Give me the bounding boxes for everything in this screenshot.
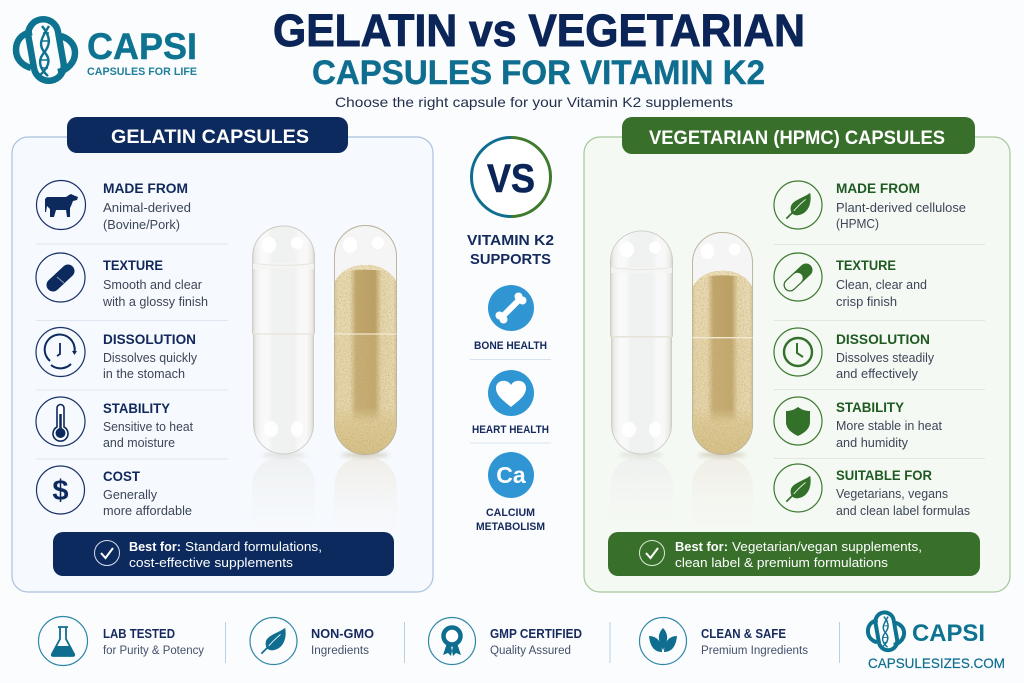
center column: VS: VS — [487, 157, 535, 201]
footer badge: gmp certified — [428, 618, 582, 664]
panel: vegetarian capsules — [584, 117, 1010, 592]
capsules: vegetarian empty and filled — [610, 231, 753, 530]
benefit: calcium metabolism: CALCIUM — [486, 507, 535, 519]
row: dissolution: DISSOLUTION — [103, 332, 196, 347]
row: cost: more affordable — [103, 504, 192, 518]
benefit: bone health: BONE HEALTH — [474, 340, 547, 352]
title — [273, 5, 805, 92]
footer badge: gmp certified: Quality Assured — [490, 645, 571, 657]
row: texture — [36, 253, 208, 309]
row: texture: with a glossy finish — [102, 295, 208, 309]
row: cost — [36, 466, 192, 518]
row: made from: MADE FROM — [103, 181, 188, 196]
row: stability: and moisture — [103, 436, 175, 450]
callout: best for gelatin — [53, 532, 394, 576]
footer badge: clean and safe: CLEAN & SAFE — [701, 627, 786, 641]
capsules: gelatin empty and filled — [252, 226, 397, 530]
benefit: calcium metabolism — [476, 452, 545, 533]
footer badge: clean and safe — [640, 618, 808, 664]
row: stability — [36, 397, 194, 450]
row: made from — [774, 181, 966, 231]
heading: vegetarian capsules: VEGETARIAN (HPMC) CAPSULES — [649, 128, 945, 149]
footer badge: lab tested — [38, 616, 204, 666]
row: made from: Animal-derived — [103, 201, 191, 215]
footer logo: capsi capsulesizes.com — [868, 611, 1005, 671]
row: dissolution: Dissolves quickly — [103, 351, 198, 365]
row: dissolution: Dissolves steadily — [836, 351, 935, 365]
row: cost: $ — [52, 475, 69, 507]
row: dissolution: and effectively — [836, 367, 919, 381]
row: suitable for: and clean label formulas — [836, 504, 970, 518]
row: made from: (HPMC) — [836, 217, 879, 231]
footer logo: capsi capsulesizes.com: CAPSULESIZES.COM — [868, 655, 1005, 671]
callout: best for gelatin: Best for: — [129, 539, 181, 554]
row: made from: Plant-derived cellulose — [836, 201, 966, 215]
benefit: calcium metabolism: Ca — [496, 462, 526, 488]
row: texture: TEXTURE — [103, 258, 163, 273]
heading: vitamin k2 supports — [467, 232, 554, 268]
row: suitable for: Vegetarians, vegans — [836, 487, 948, 501]
row: stability — [774, 397, 943, 450]
title: GELATIN vs VEGETARIAN — [273, 5, 805, 56]
row: texture: Clean, clear and — [836, 278, 927, 292]
benefit: heart health: HEART HEALTH — [472, 424, 549, 436]
callout: best for vegetarian — [608, 532, 980, 576]
benefit: bone health — [474, 285, 547, 352]
heading: gelatin capsules: GELATIN CAPSULES — [111, 127, 309, 148]
callout: best for vegetarian: Best for: — [675, 539, 728, 554]
title: CAPSULES FOR VITAMIN K2 — [312, 54, 765, 92]
row: texture: crisp finish — [836, 295, 897, 309]
row: stability: More stable in heat — [836, 419, 943, 433]
callout: best for vegetarian: clean label & premium formulations — [675, 555, 889, 570]
footer badge: non-gmo — [250, 618, 374, 664]
footer logo: capsi capsulesizes.com: CAPSI — [912, 620, 985, 647]
callout: best for vegetarian: Vegetarian/vegan supplements, — [732, 539, 922, 554]
callout: best for gelatin: cost-effective supplements — [129, 555, 294, 570]
logo: CAPSI: CAPSULES FOR LIFE — [87, 66, 197, 78]
benefit: heart health — [472, 370, 549, 436]
footer badge: lab tested: for Purity & Potency — [103, 645, 204, 657]
row: suitable for: SUITABLE FOR — [836, 468, 932, 483]
row: stability: Sensitive to heat — [103, 420, 194, 434]
row: stability: STABILITY — [103, 401, 170, 416]
callout: best for gelatin: Standard formulations, — [185, 539, 322, 554]
row: made from: (Bovine/Pork) — [103, 218, 180, 232]
row: texture: TEXTURE — [836, 258, 896, 273]
center column: VS — [472, 138, 550, 216]
row: cost: Generally — [103, 488, 158, 502]
row: dissolution — [36, 328, 198, 381]
heading: gelatin capsules — [67, 117, 348, 153]
row: suitable for — [774, 464, 970, 518]
footer badge: clean and safe: Premium Ingredients — [701, 645, 808, 657]
footer badge: gmp certified: GMP CERTIFIED — [490, 627, 582, 641]
row: made from: MADE FROM — [836, 181, 920, 196]
heading: vegetarian capsules — [622, 117, 975, 154]
benefit: calcium metabolism: METABOLISM — [476, 521, 545, 533]
panel: gelatin capsules — [12, 117, 433, 592]
row: texture — [774, 253, 927, 309]
row: dissolution — [774, 328, 935, 381]
heading: vitamin k2 supports: SUPPORTS — [470, 251, 551, 268]
row: dissolution: DISSOLUTION — [836, 332, 930, 347]
row: stability: and humidity — [836, 436, 909, 450]
footer badge: non-gmo: Ingredients — [311, 645, 369, 657]
heading: vitamin k2 supports: VITAMIN K2 — [467, 232, 554, 249]
footer badge: non-gmo: NON-GMO — [311, 627, 374, 641]
logo: CAPSI — [16, 17, 197, 83]
row: stability: STABILITY — [836, 400, 904, 415]
subtitle: Choose the right capsule for your Vitamin K2 supplements — [335, 94, 733, 110]
logo: CAPSI: CAPSI — [87, 26, 197, 67]
row: dissolution: in the stomach — [103, 367, 185, 381]
row: cost: COST — [103, 469, 141, 484]
row: texture: Smooth and clear — [103, 278, 202, 292]
row: made from — [36, 180, 191, 232]
footer badge: lab tested: LAB TESTED — [103, 627, 175, 641]
